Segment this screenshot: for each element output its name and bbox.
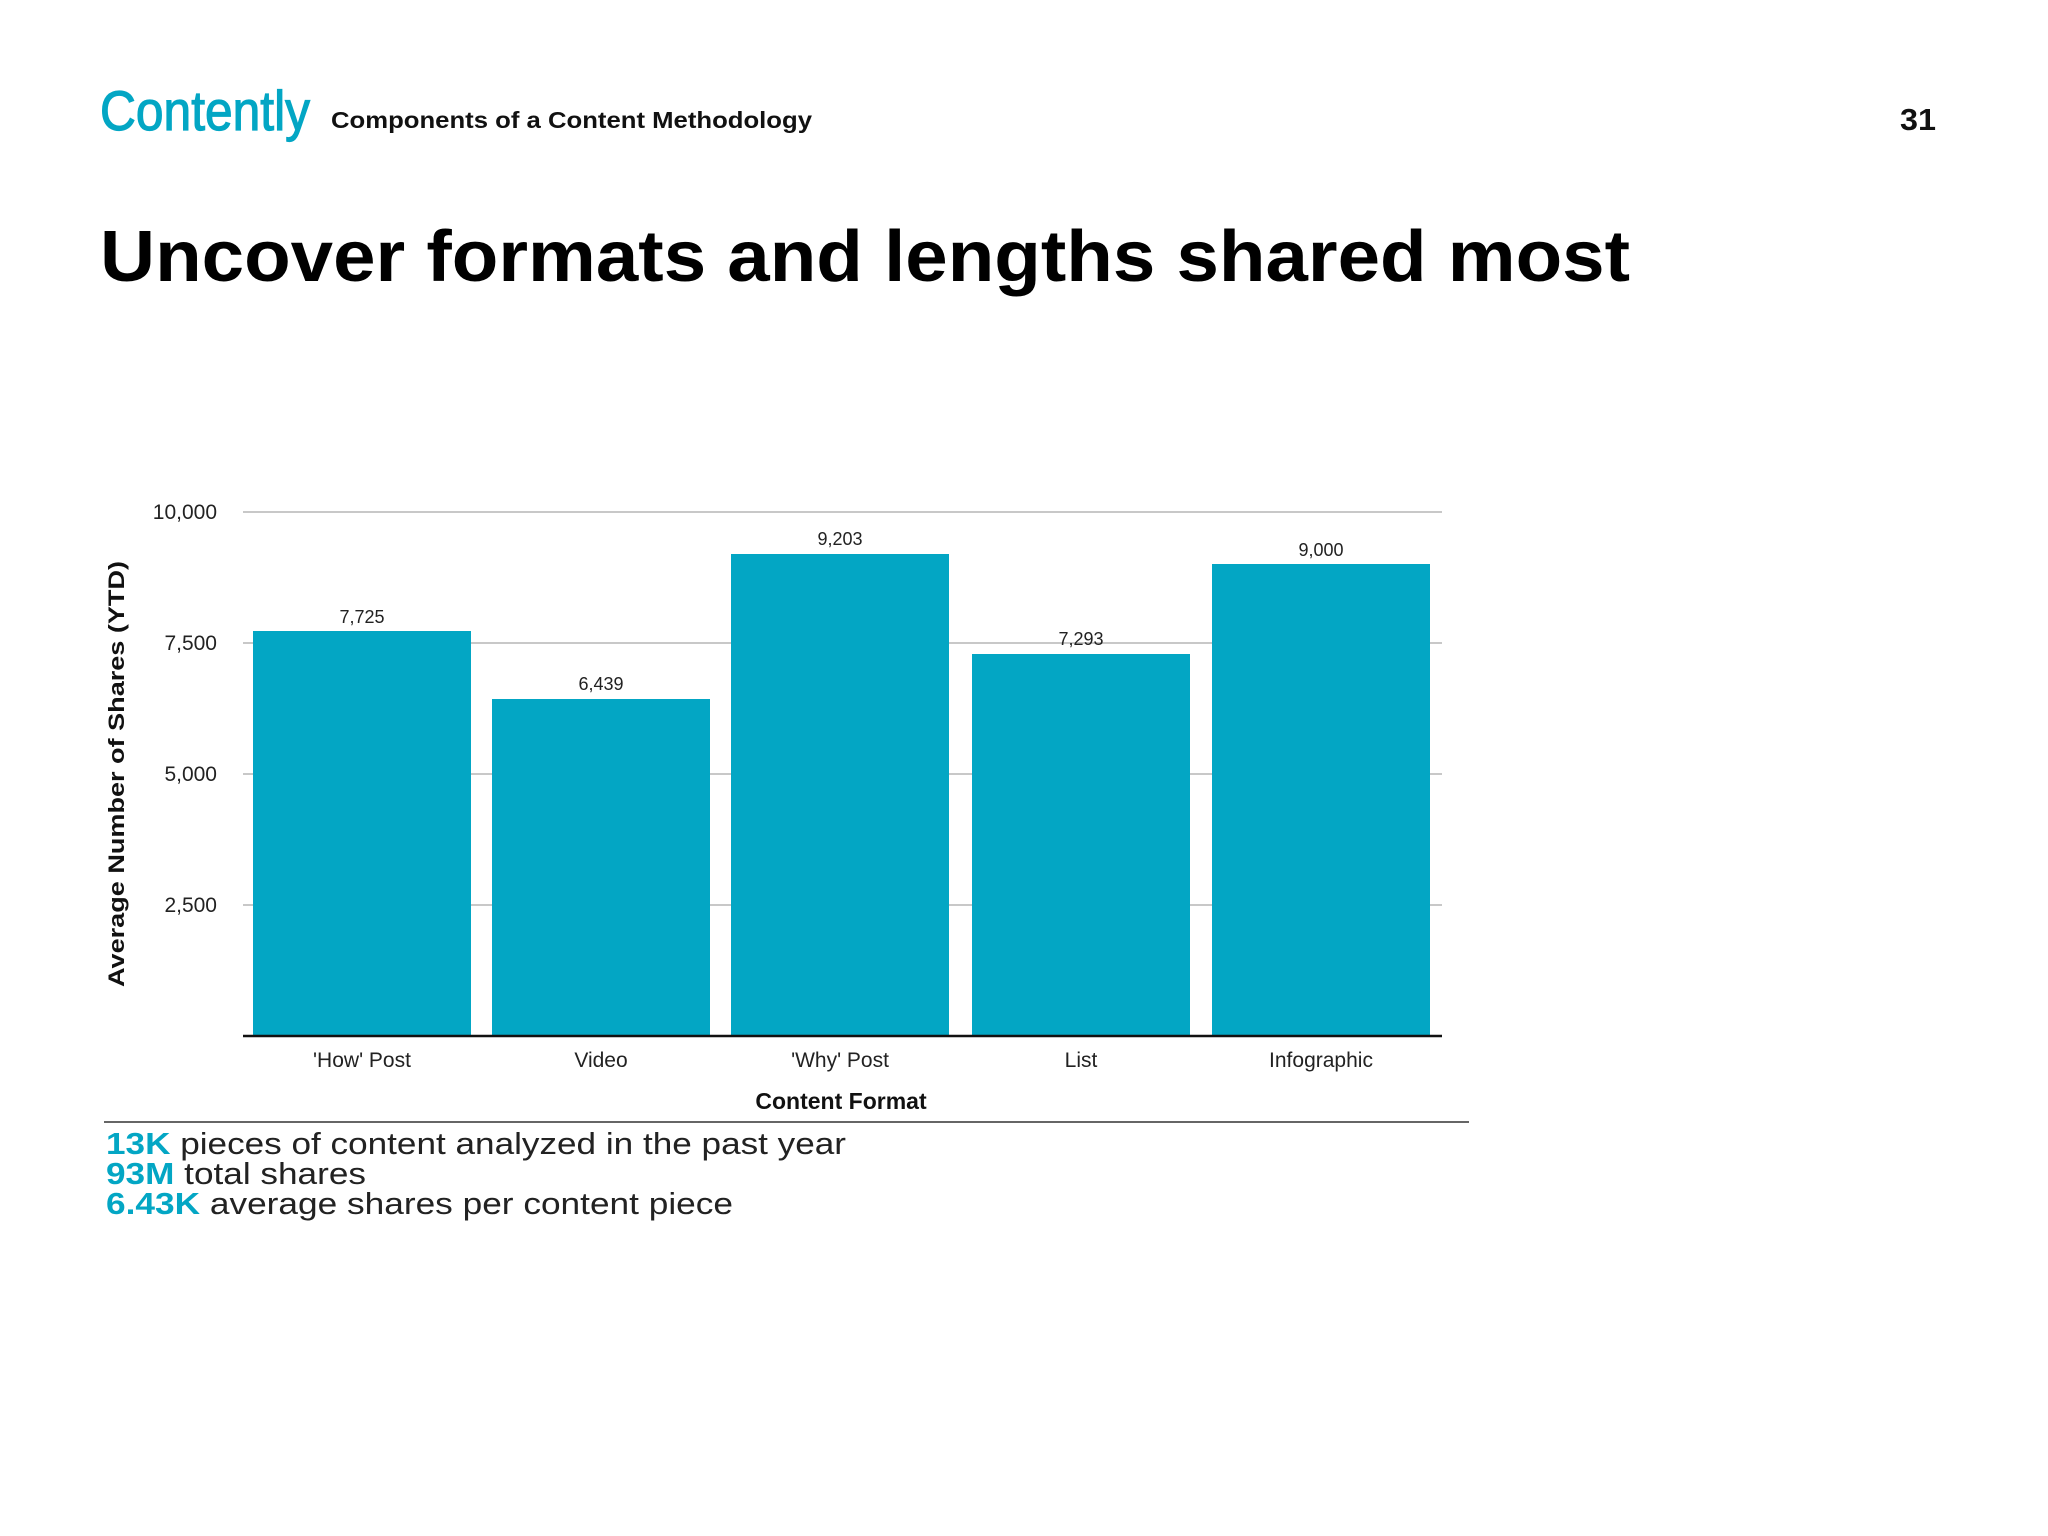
bar chart: [104, 501, 1442, 1114]
page number: 31: [1900, 102, 1936, 137]
y-axis tick labels: 2,500: [164, 894, 217, 917]
value labels: [339, 529, 1344, 694]
y-axis title: Average Number of Shares (YTD): [104, 561, 129, 987]
y-axis tick labels: [153, 501, 217, 917]
value labels: 7,293: [1058, 629, 1104, 649]
logo: Contently: [100, 79, 310, 142]
stats text block: [106, 1126, 846, 1221]
y-axis tick labels: 5,000: [164, 763, 217, 786]
category labels: 'Why' Post: [791, 1049, 889, 1072]
title: Uncover formats and lengths shared most: [100, 217, 1630, 297]
category labels: Infographic: [1269, 1049, 1373, 1072]
value labels: 9,000: [1298, 540, 1344, 560]
category labels: [313, 1049, 1373, 1072]
value labels: 6,439: [578, 674, 624, 694]
category labels: 'How' Post: [313, 1049, 411, 1072]
y-axis tick labels: 10,000: [153, 501, 217, 524]
stats text block: 6.43K average shares per content piece: [106, 1186, 733, 1221]
category labels: Video: [574, 1049, 628, 1072]
value labels: 7,725: [339, 607, 385, 627]
value labels: 9,203: [817, 529, 863, 549]
stats text block: 13K pieces of content analyzed in the past year: [106, 1126, 846, 1161]
category labels: List: [1065, 1049, 1098, 1072]
bars: [253, 554, 1430, 1036]
y-axis tick labels: 7,500: [164, 632, 217, 655]
header subtitle: Components of a Content Methodology: [331, 107, 812, 133]
x-axis title: Content Format: [755, 1088, 927, 1114]
stats text block: 93M total shares: [106, 1156, 366, 1191]
